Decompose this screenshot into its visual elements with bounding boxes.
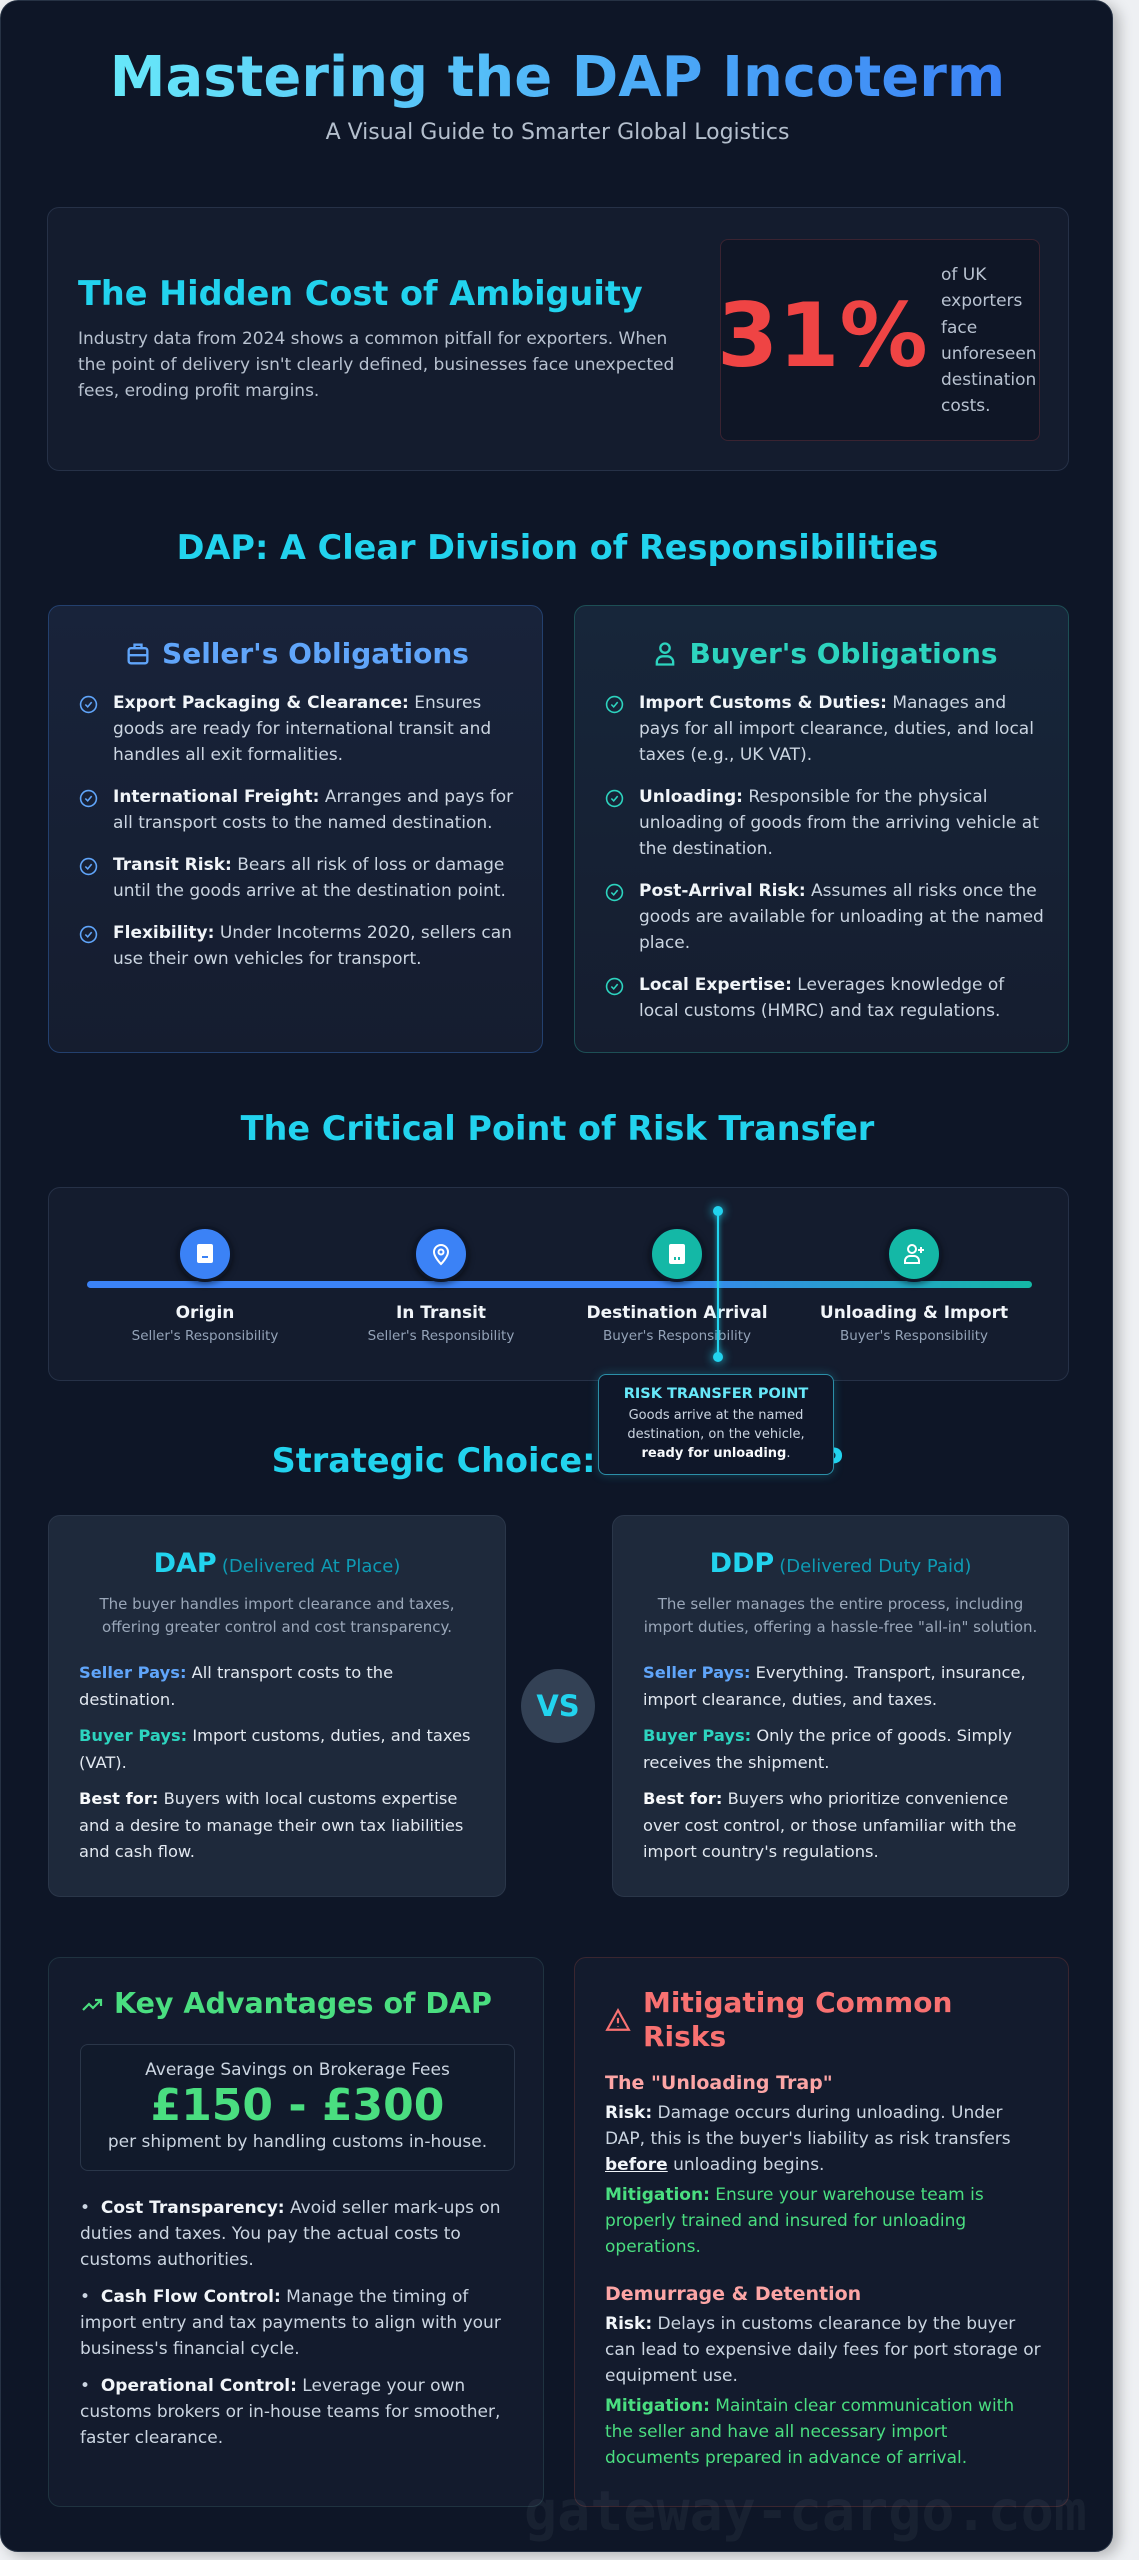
icon: VS badge xyxy=(521,1669,595,1743)
savings box xyxy=(80,2044,515,2171)
risk: demurrage: Demurrage & Detention xyxy=(605,2283,861,2305)
panel: hidden cost xyxy=(47,207,1069,471)
stat caption: of UK xyxy=(941,265,986,285)
DAP title: DAP (Delivered At Place) xyxy=(154,1548,400,1579)
stat caption: exporters xyxy=(941,291,1022,311)
heading: division of responsibilities: DAP: A Clear Division of Responsibilities xyxy=(177,528,938,567)
savings box: £150 - £300 xyxy=(151,2080,444,2131)
DAP description: The buyer handles import clearance and taxes, xyxy=(100,1595,454,1613)
savings box: per shipment by handling customs in-house. xyxy=(108,2132,487,2152)
panel: key advantages xyxy=(48,1957,544,2507)
list: seller items: International Freight: Arranges and pays for all transport costs to the named destination. xyxy=(113,787,513,833)
list: advantages xyxy=(80,2198,501,2448)
label: destination arrival: Destination Arrival xyxy=(586,1303,768,1323)
callout: risk transfer point: destination, on the vehicle, xyxy=(627,1427,805,1442)
heading: mitigating xyxy=(605,1986,952,2053)
stat caption: face xyxy=(941,318,977,338)
icon: in transit xyxy=(413,1226,469,1282)
panel: DAP card: Seller Pays: All transport costs to the destination. xyxy=(79,1663,393,1708)
DAP description xyxy=(99,1595,454,1636)
heading: mitigating: Risks xyxy=(643,2020,726,2053)
risk transfer marker line xyxy=(717,1210,719,1358)
risk: demurrage xyxy=(605,2283,1041,2468)
panel: DAP card xyxy=(48,1515,506,1897)
icon: destination xyxy=(649,1226,705,1282)
icon: origin xyxy=(177,1226,233,1282)
list: buyer items: Local Expertise: Leverages knowledge of local customs (HMRC) and tax regulations. xyxy=(639,975,1004,1021)
DDP description: The seller manages the entire process, including xyxy=(658,1595,1023,1613)
panel: DAP card: Buyer Pays: Import customs, duties, and taxes (VAT). xyxy=(79,1726,471,1772)
savings box: Average Savings on Brokerage Fees xyxy=(145,2060,450,2080)
risk: unloading trap: The "Unloading Trap" xyxy=(605,2072,833,2094)
list: seller items xyxy=(80,693,514,969)
DDP description: import duties, offering a hassle-free "all-in" solution. xyxy=(644,1618,1037,1636)
watermark: gateway-cargo.com xyxy=(524,2479,1087,2543)
callout: risk transfer point: RISK TRANSFER POINT xyxy=(624,1386,808,1402)
label: destination arrival xyxy=(586,1303,768,1344)
panel: DAP card: Best for: Buyers with local customs expertise and a desire to manage their own tax liabilities and cash flow. xyxy=(79,1789,463,1861)
heading: hidden cost: The Hidden Cost of Ambiguity xyxy=(78,274,643,313)
list: seller items: Transit Risk: Bears all risk of loss or damage until the goods arrive at the destination point. xyxy=(113,855,506,901)
DAP description: offering greater control and cost transparency. xyxy=(102,1618,452,1636)
risk: demurrage: Risk: Delays in customs clearance by the buyer can lead to expensive daily fees for port storage or equipment use. xyxy=(605,2314,1041,2386)
heading: risk transfer: The Critical Point of Risk Transfer xyxy=(241,1109,874,1148)
subtitle: A Visual Guide to Smarter Global Logistics xyxy=(326,120,789,145)
label: origin xyxy=(132,1303,278,1344)
callout: risk transfer point xyxy=(598,1374,834,1475)
panel: mitigating risks xyxy=(574,1957,1069,2507)
icon: unloading xyxy=(886,1226,942,1282)
label: destination arrival: Buyer's Responsibility xyxy=(603,1328,751,1344)
label: in transit xyxy=(368,1303,514,1344)
stat caption: unforeseen xyxy=(941,344,1037,364)
text: hidden cost paragraph: Industry data from 2024 shows a common pitfall for exporters. When the point of delivery isn't clearly defined, businesses face unexpected fees, eroding profit margins. xyxy=(78,329,674,401)
label: unloading & import xyxy=(820,1303,1008,1344)
list: buyer items xyxy=(606,693,1044,1021)
DDP description xyxy=(644,1595,1037,1636)
list: buyer items: Import Customs & Duties: Manages and pays for all import clearance, duties, and local taxes (e.g., UK VAT). xyxy=(639,693,1034,765)
risk: demurrage: Mitigation: Maintain clear communication with the seller and have all necessary import documents prepared in advance of arrival. xyxy=(605,2396,1014,2468)
label: in transit: Seller's Responsibility xyxy=(368,1328,514,1344)
list: advantages: • Cash Flow Control: Manage the timing of import entry and tax payments to align with your business's financial cycle. xyxy=(80,2287,501,2359)
heading: mitigating: Mitigating Common xyxy=(643,1986,952,2019)
heading: buyer: Buyer's Obligations xyxy=(689,637,998,670)
title: Mastering the DAP Incoterm xyxy=(110,45,1005,110)
stat caption: destination xyxy=(941,370,1036,390)
list: buyer items: Post-Arrival Risk: Assumes all risks once the goods are available for unloading at the named place. xyxy=(639,881,1044,953)
label: unloading & import: Buyer's Responsibility xyxy=(840,1328,988,1344)
callout: risk transfer point: Goods arrive at the named xyxy=(629,1408,803,1423)
label: unloading & import: Unloading & Import xyxy=(820,1303,1008,1323)
list: advantages: • Cost Transparency: Avoid seller mark-ups on duties and taxes. You pay the actual costs to customs authorities. xyxy=(80,2198,501,2270)
panel: timeline xyxy=(48,1187,1069,1381)
label: origin: Origin xyxy=(176,1303,234,1323)
callout: risk transfer point: ready for unloading. xyxy=(642,1446,790,1461)
stat box: 31% xyxy=(720,239,1040,441)
list: seller items: Flexibility: Under Incoterms 2020, sellers can use their own vehicles for transport. xyxy=(113,923,512,969)
panel: DDP card xyxy=(612,1515,1069,1897)
label: in transit: In Transit xyxy=(396,1303,486,1323)
risk: unloading trap xyxy=(605,2072,1011,2257)
icon: VS badge: VS xyxy=(536,1689,580,1723)
panel: seller obligations xyxy=(48,605,543,1053)
timeline bar xyxy=(87,1281,1032,1288)
stat number: 31% xyxy=(717,284,928,387)
stat caption xyxy=(941,265,1037,416)
heading: advantages: Key Advantages of DAP xyxy=(114,1987,492,2020)
DDP title: DDP (Delivered Duty Paid) xyxy=(710,1548,971,1579)
heading: strategic choice: Strategic Choice: DAP vs. DDP xyxy=(272,1441,843,1480)
risk: unloading trap: Mitigation: Ensure your warehouse team is properly trained and insured for unloading operations. xyxy=(605,2185,984,2257)
list: seller items: Export Packaging & Clearance: Ensures goods are ready for international transit and handles all exit formalities. xyxy=(113,693,491,765)
list: buyer items: Unloading: Responsible for the physical unloading of goods from the arriving vehicle at the destination. xyxy=(639,787,1039,859)
list: advantages: • Operational Control: Leverage your own customs brokers or in-house teams for smoother, faster clearance. xyxy=(80,2376,500,2448)
panel: DDP card: Best for: Buyers who prioritize convenience over cost control, or those unfamiliar with the import country's regulations. xyxy=(643,1789,1016,1861)
panel: DDP card: Buyer Pays: Only the price of goods. Simply receives the shipment. xyxy=(643,1726,1012,1772)
stat caption: costs. xyxy=(941,396,991,416)
panel: buyer obligations xyxy=(574,605,1069,1053)
panel: DDP card: Seller Pays: Everything. Transport, insurance, import clearance, duties, and taxes. xyxy=(643,1663,1026,1708)
label: origin: Seller's Responsibility xyxy=(132,1328,278,1344)
risk: unloading trap: Risk: Damage occurs during unloading. Under DAP, this is the buyer's liability as risk transfers before unloading begins. xyxy=(605,2103,1011,2175)
heading: seller: Seller's Obligations xyxy=(162,637,469,670)
